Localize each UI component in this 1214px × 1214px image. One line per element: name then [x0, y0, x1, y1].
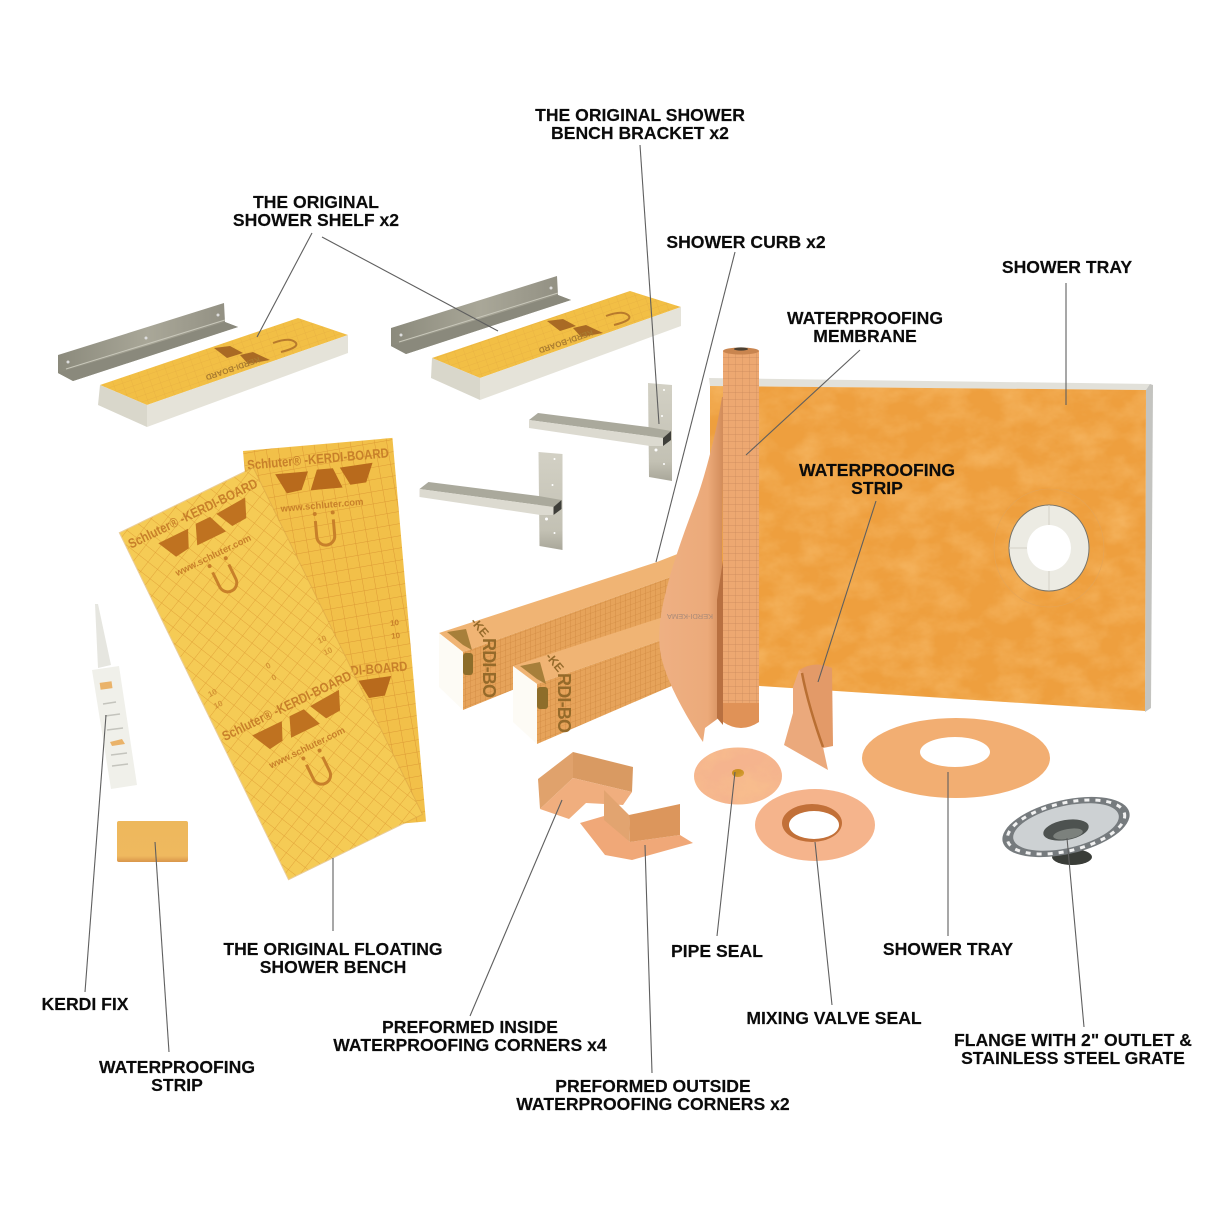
label: outside corners: WATERPROOFING CORNERS x2	[516, 1094, 790, 1114]
waterproofing strip roll	[784, 664, 833, 770]
label: kerdi fix: KERDI FIX	[42, 994, 129, 1014]
shower curb 1: -KE	[468, 615, 492, 640]
angle bracket 1	[58, 303, 238, 381]
front board: 10	[322, 645, 334, 657]
back board: 10	[390, 618, 400, 628]
bench bracket 2	[420, 452, 562, 550]
waterproofing strip roll small	[117, 821, 188, 862]
front board: www.schluter.com	[173, 533, 253, 579]
label: pipe seal: PIPE SEAL	[671, 941, 763, 961]
leader lines	[85, 145, 1084, 1073]
floating shower bench boards	[119, 438, 426, 880]
label: shower shelf: THE ORIGINAL	[253, 192, 379, 212]
front board: 0	[270, 672, 278, 683]
foam shelf 1	[98, 318, 348, 427]
shower curb 2	[513, 608, 690, 744]
label: floating bench: THE ORIGINAL FLOATING	[223, 939, 443, 959]
preformed outside corner	[580, 790, 693, 860]
shower shelf 1	[58, 303, 348, 427]
front board: www.schluter.com	[267, 725, 347, 772]
back board: Schluter® -KERDI-BOARD	[247, 445, 390, 473]
front board: 10	[316, 633, 329, 646]
label: inside corners: PREFORMED INSIDE	[382, 1017, 558, 1037]
label: bench bracket: BENCH BRACKET x2	[551, 123, 729, 143]
shower curb 1	[439, 553, 690, 710]
foam shelf 1: KERDI-BOARD	[204, 355, 261, 382]
preformed inside corner	[538, 752, 633, 819]
mixing valve seal	[755, 789, 875, 861]
back board: www.schluter.com	[279, 497, 364, 515]
pipe seal	[694, 748, 782, 804]
shower curb 2: -KE	[543, 650, 567, 675]
label: membrane: MEMBRANE	[813, 326, 917, 346]
label: strip on tray: STRIP	[851, 478, 903, 498]
label: waterproofing strip: WATERPROOFING	[99, 1057, 255, 1077]
foam shelf 2	[431, 291, 681, 400]
waterproofing membrane roll: KERDI-KEMA	[667, 612, 713, 621]
bench bracket 1	[529, 383, 672, 481]
label: waterproofing strip: STRIP	[151, 1075, 203, 1095]
back board: 10	[391, 631, 401, 641]
waterproofing membrane roll	[659, 347, 759, 742]
label: floating bench: SHOWER BENCH	[260, 957, 406, 977]
front board: Schluter® -KERDI-BOARD	[126, 476, 260, 551]
shower tray board	[709, 378, 1153, 712]
large shower tray ring seal	[862, 718, 1050, 798]
label: strip on tray: WATERPROOFING	[799, 460, 955, 480]
front board: 10	[212, 699, 225, 711]
back board	[243, 438, 426, 835]
label: shower tray: SHOWER TRAY	[1002, 257, 1132, 277]
label: bench bracket: THE ORIGINAL SHOWER	[535, 105, 745, 125]
label: shower shelf: SHOWER SHELF x2	[233, 210, 399, 230]
labels	[42, 105, 1192, 1114]
shower curb 1: RDI-BO	[479, 638, 499, 698]
label: shower tray seal: SHOWER TRAY	[883, 939, 1013, 959]
label: flange: FLANGE WITH 2" OUTLET &	[954, 1030, 1192, 1050]
label: membrane: WATERPROOFING	[787, 308, 943, 328]
flange with grate	[997, 786, 1135, 868]
drain opening	[994, 489, 1104, 607]
back board: Schluter® -KERDI-BOARD	[265, 659, 408, 686]
shower shelf 2	[391, 276, 681, 400]
front board: Schluter® -KERDI-BOARD	[220, 668, 354, 744]
label: flange: STAINLESS STEEL GRATE	[961, 1048, 1185, 1068]
foam shelf 2: KERDI-BOARD	[537, 328, 594, 355]
label: shower curb: SHOWER CURB x2	[666, 232, 826, 252]
front board: 0	[264, 661, 273, 671]
front board: 10	[207, 687, 219, 699]
shower curb 2: RDI-BO	[554, 673, 574, 733]
label: inside corners: WATERPROOFING CORNERS x4	[333, 1035, 607, 1055]
label: outside corners: PREFORMED OUTSIDE	[555, 1076, 751, 1096]
angle bracket 2	[391, 276, 571, 354]
label: mixing valve seal: MIXING VALVE SEAL	[746, 1008, 922, 1028]
kerdi fix tube	[92, 604, 137, 789]
front board	[119, 467, 423, 880]
